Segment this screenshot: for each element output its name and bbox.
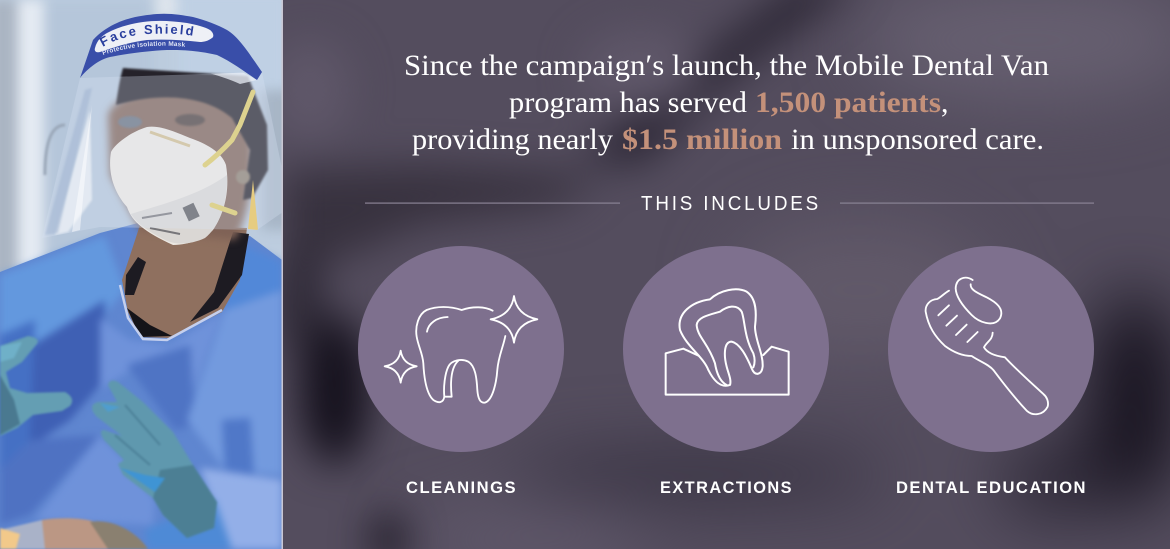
neck, lanyard and shirt bbox=[120, 225, 249, 340]
panel: photo of dental worker bbox=[0, 0, 282, 549]
face shield band bbox=[80, 14, 262, 80]
heading text: Since the campaign′s launch, the Mobile Dental Van bbox=[404, 49, 1049, 82]
panel: blurred background bbox=[270, 0, 1170, 549]
right glove bbox=[92, 381, 217, 538]
icon: toothbrush with toothpaste bbox=[926, 278, 1048, 414]
heading text: 1,500 patients bbox=[755, 86, 941, 119]
heading text bbox=[404, 49, 1049, 156]
heading text: providing nearly bbox=[412, 123, 613, 156]
face shield visor bbox=[46, 72, 282, 236]
left glove bbox=[0, 336, 72, 436]
label: cleanings: CLEANINGS bbox=[406, 478, 517, 497]
respirator mask bbox=[110, 92, 253, 245]
icon: sparkling tooth bbox=[385, 296, 537, 403]
label: dental education: DENTAL EDUCATION bbox=[896, 478, 1087, 497]
heading text: , bbox=[941, 86, 948, 119]
panel: extractions bbox=[623, 246, 829, 497]
patient head bbox=[0, 518, 148, 549]
clinic background bbox=[0, 0, 282, 272]
divider between photo and panel bbox=[282, 0, 283, 549]
heading text: in unsponsored care. bbox=[791, 123, 1044, 156]
face and hair bbox=[108, 68, 268, 240]
panel: dental education bbox=[888, 246, 1094, 497]
face shield band: Protective Isolation Mask bbox=[102, 41, 186, 55]
panel: cleanings bbox=[358, 246, 564, 497]
label: extractions: EXTRACTIONS bbox=[660, 478, 793, 497]
face shield band: Face Shield bbox=[100, 24, 194, 46]
icon: tooth extraction bbox=[666, 289, 789, 395]
heading text: program has served bbox=[509, 86, 747, 119]
heading text: $1.5 million bbox=[622, 123, 782, 156]
subheading: this includes: THIS INCLUDES bbox=[641, 193, 821, 215]
gown bbox=[0, 222, 282, 549]
